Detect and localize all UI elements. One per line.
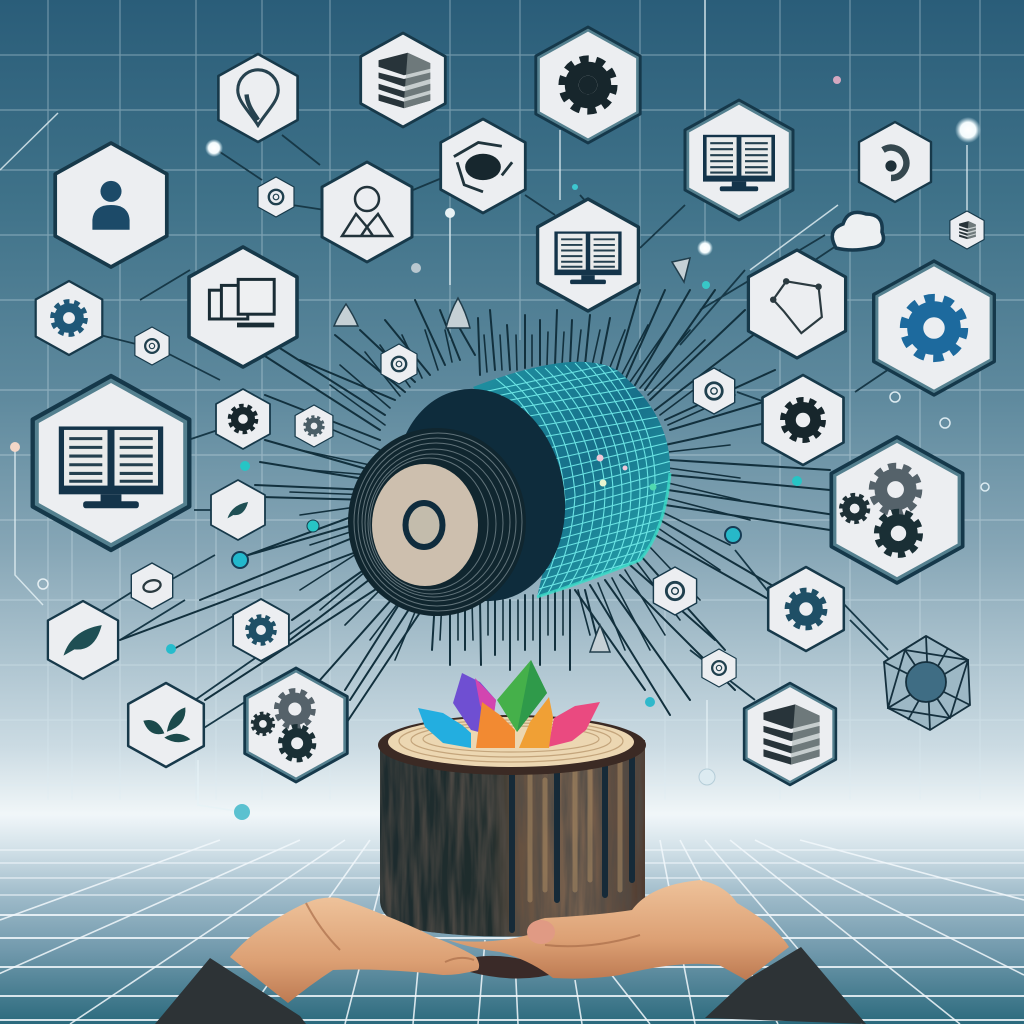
hexagon: leaf centre left (211, 480, 265, 540)
hexagon: gear lower right (768, 567, 844, 651)
hexagon: gears right (831, 437, 963, 583)
hexagon: book stack bottom right (744, 683, 836, 785)
hexagon: small gear (295, 405, 333, 447)
hexagon: gear right (762, 375, 844, 465)
hexagon: ring lower right (653, 567, 697, 615)
hexagon: ring right (693, 368, 735, 414)
hexagon: monitors (189, 247, 297, 367)
right thumb (527, 920, 555, 944)
colourful leaves (418, 660, 600, 748)
icon: cloud (832, 212, 884, 250)
hexagon: blue gear left (36, 281, 102, 355)
blue leaf (418, 708, 471, 748)
dark navy crescent (376, 373, 584, 617)
floor grid (0, 840, 1024, 1024)
hexagon: black gear (536, 27, 640, 143)
left orange leaf (476, 702, 515, 748)
coiled front face (348, 428, 526, 616)
green leaf shaded side (517, 660, 547, 732)
purple leaf pink side (475, 678, 496, 730)
bark texture (380, 750, 644, 936)
hexagon: magnet (859, 122, 931, 202)
hexagon: polygon network (748, 250, 846, 358)
light circuit traces (0, 0, 967, 812)
green leaf (497, 660, 547, 732)
hexagon: feather (48, 601, 118, 679)
hexagon: swirl (131, 563, 173, 609)
hexagon: small ring left (135, 327, 169, 365)
hexagon: person outline (322, 162, 412, 262)
cut top of trunk (378, 715, 646, 775)
connector lines between hexagons (88, 135, 895, 738)
hexagon: plant leaves (128, 683, 204, 767)
radial data lines from the cylinder (120, 290, 835, 725)
hexagon: open book monitor upper right (685, 100, 793, 220)
left sleeve (155, 958, 306, 1024)
hexagon: book stack top (361, 33, 445, 127)
right orange leaf (519, 697, 553, 748)
pink leaf (548, 702, 600, 747)
hexagon: large blue gear (874, 261, 994, 395)
floor (0, 815, 1024, 1024)
cylinder body with teal data grid (470, 362, 675, 600)
data sparkles (596, 454, 656, 490)
shadow between hands (470, 956, 560, 978)
hexagon: gear lower left (233, 599, 289, 661)
dense short spikes around the cylinder (290, 325, 750, 660)
hexagon: ring upper centre (381, 344, 417, 384)
left hand (230, 898, 479, 1003)
central cylinder (348, 362, 675, 617)
small tag icons (334, 258, 690, 652)
beige disk (372, 464, 478, 586)
hexagon: gears lower left (245, 668, 347, 782)
right sleeve (705, 947, 866, 1024)
tree trunk (378, 715, 646, 940)
hexagon: person (55, 143, 167, 267)
hexagon: gear left centre (216, 389, 270, 449)
hexagon: open book monitor centre (538, 199, 638, 311)
background circuit grid (0, 0, 1024, 800)
hexagon: speech bubble (441, 119, 525, 213)
hexagon: location pin (218, 54, 298, 142)
right hand (448, 880, 789, 980)
purple leaf (453, 673, 496, 735)
wireframe polygon network (884, 636, 970, 730)
hexagon: small ring bottom (702, 649, 736, 687)
finger shadows (306, 903, 640, 962)
hexagon: small ring (258, 177, 294, 217)
network nodes (10, 76, 989, 820)
hexagon: large open book monitor (33, 376, 189, 550)
hexagon: small book top right (950, 211, 984, 249)
bright lower edge (537, 473, 670, 597)
disk ring (406, 503, 442, 547)
